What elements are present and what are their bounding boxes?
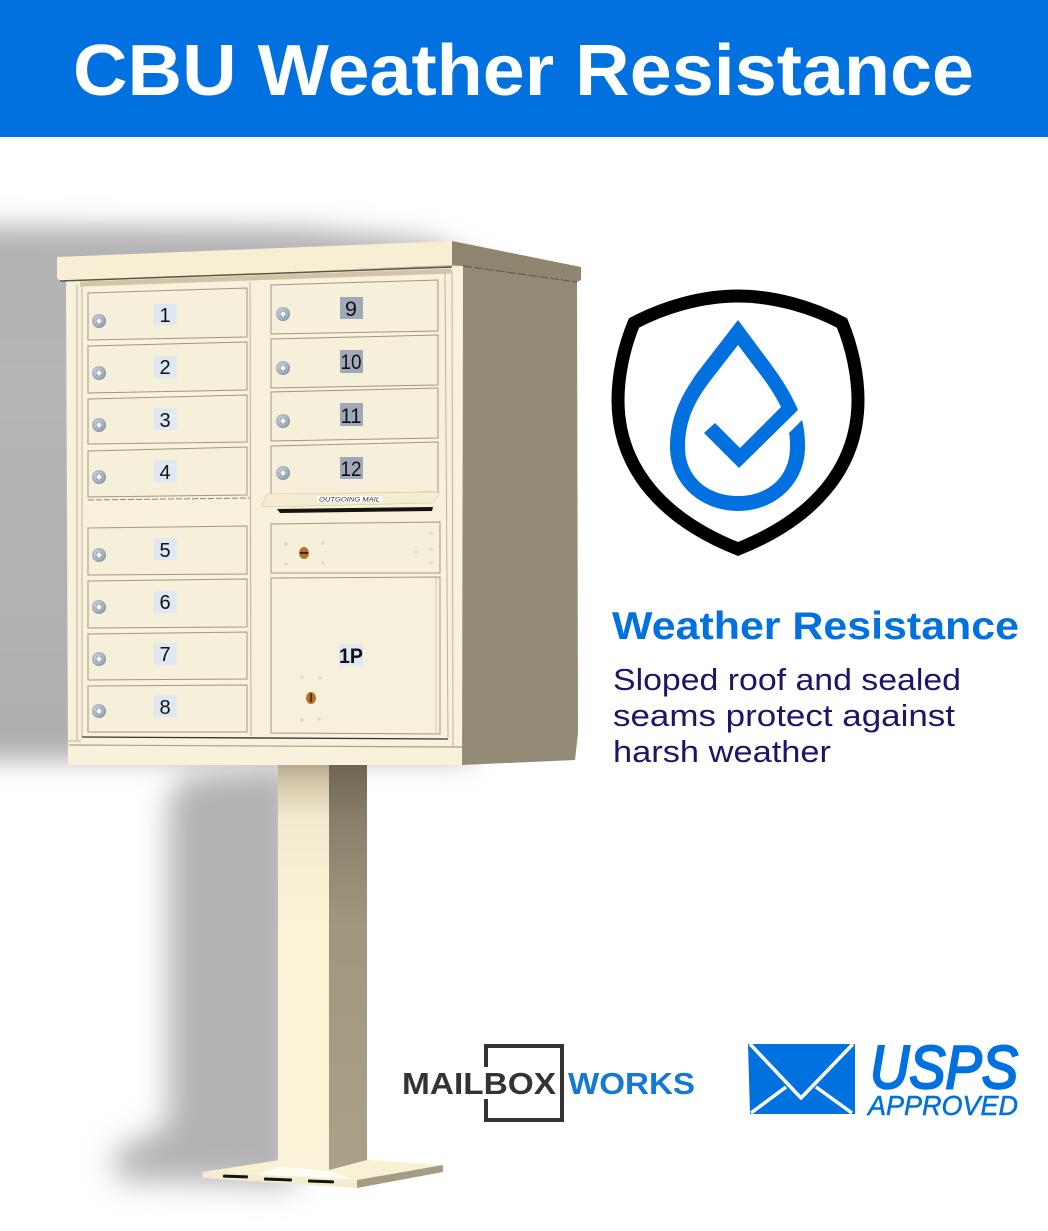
left column number plates: 8 [159,697,171,719]
left column number plates: 6 [159,592,171,614]
feature description [613,662,961,769]
left column number plates [154,304,177,719]
logo: USPS approved: APPROVED [866,1090,1018,1121]
roof front [57,241,452,281]
outgoing mail slot: OUTGOING MAIL [319,498,380,504]
left column number plates: 7 [159,644,171,666]
cast shadow on wall [0,226,520,1186]
feature description: seams protect against [613,698,955,733]
pedestal post [278,762,367,1170]
outgoing mail slot [262,492,440,513]
roof side seam [463,266,577,282]
left column number plates: 5 [159,540,171,562]
right column number plates: 12 [340,457,362,481]
feature heading: Weather Resistance [612,605,1019,648]
front body [66,266,463,765]
frame top band [80,271,451,284]
logo: Mailbox Works: WORKS [568,1066,695,1101]
left column number plates: 3 [159,410,171,432]
water drop with check [670,320,805,511]
feature description: Sloped roof and sealed [613,662,961,697]
feature text [612,605,1019,769]
right column number plates [340,297,363,481]
logo: Mailbox Works: MAILBOX [402,1066,556,1101]
right column doors [271,280,438,495]
frame bottom dark line [82,737,448,739]
frame bottom lip [69,745,462,747]
left column number plates: 2 [159,357,171,379]
parcel door [271,577,440,734]
icon: shield with water drop [618,296,858,549]
gap dashed line [88,498,250,500]
parcel door: 1P [339,645,363,668]
right column number plates: 9 [345,297,357,321]
shield outline [618,296,858,549]
right column number plates: 10 [340,350,362,374]
left column number plates: 1 [159,305,171,327]
side panel [462,266,578,765]
pedestal base plate [202,1160,443,1188]
title: CBU Weather Resistance [73,31,974,111]
header banner [0,0,1048,137]
logo: USPS approved [748,1034,1018,1121]
cluster box unit [57,241,581,1188]
outgoing panel [271,522,440,573]
logo: USPS approved: USPS [870,1034,1018,1101]
left column number plates: 4 [159,462,171,484]
locks [92,307,318,718]
right column number plates: 11 [340,404,362,428]
roof shadow line [60,267,452,281]
envelope icon [748,1044,855,1114]
left column doors [88,288,247,732]
logo: Mailbox Works [402,1046,695,1120]
roof side [452,241,581,282]
feature description: harsh weather [613,734,831,769]
frame lines [68,270,453,746]
